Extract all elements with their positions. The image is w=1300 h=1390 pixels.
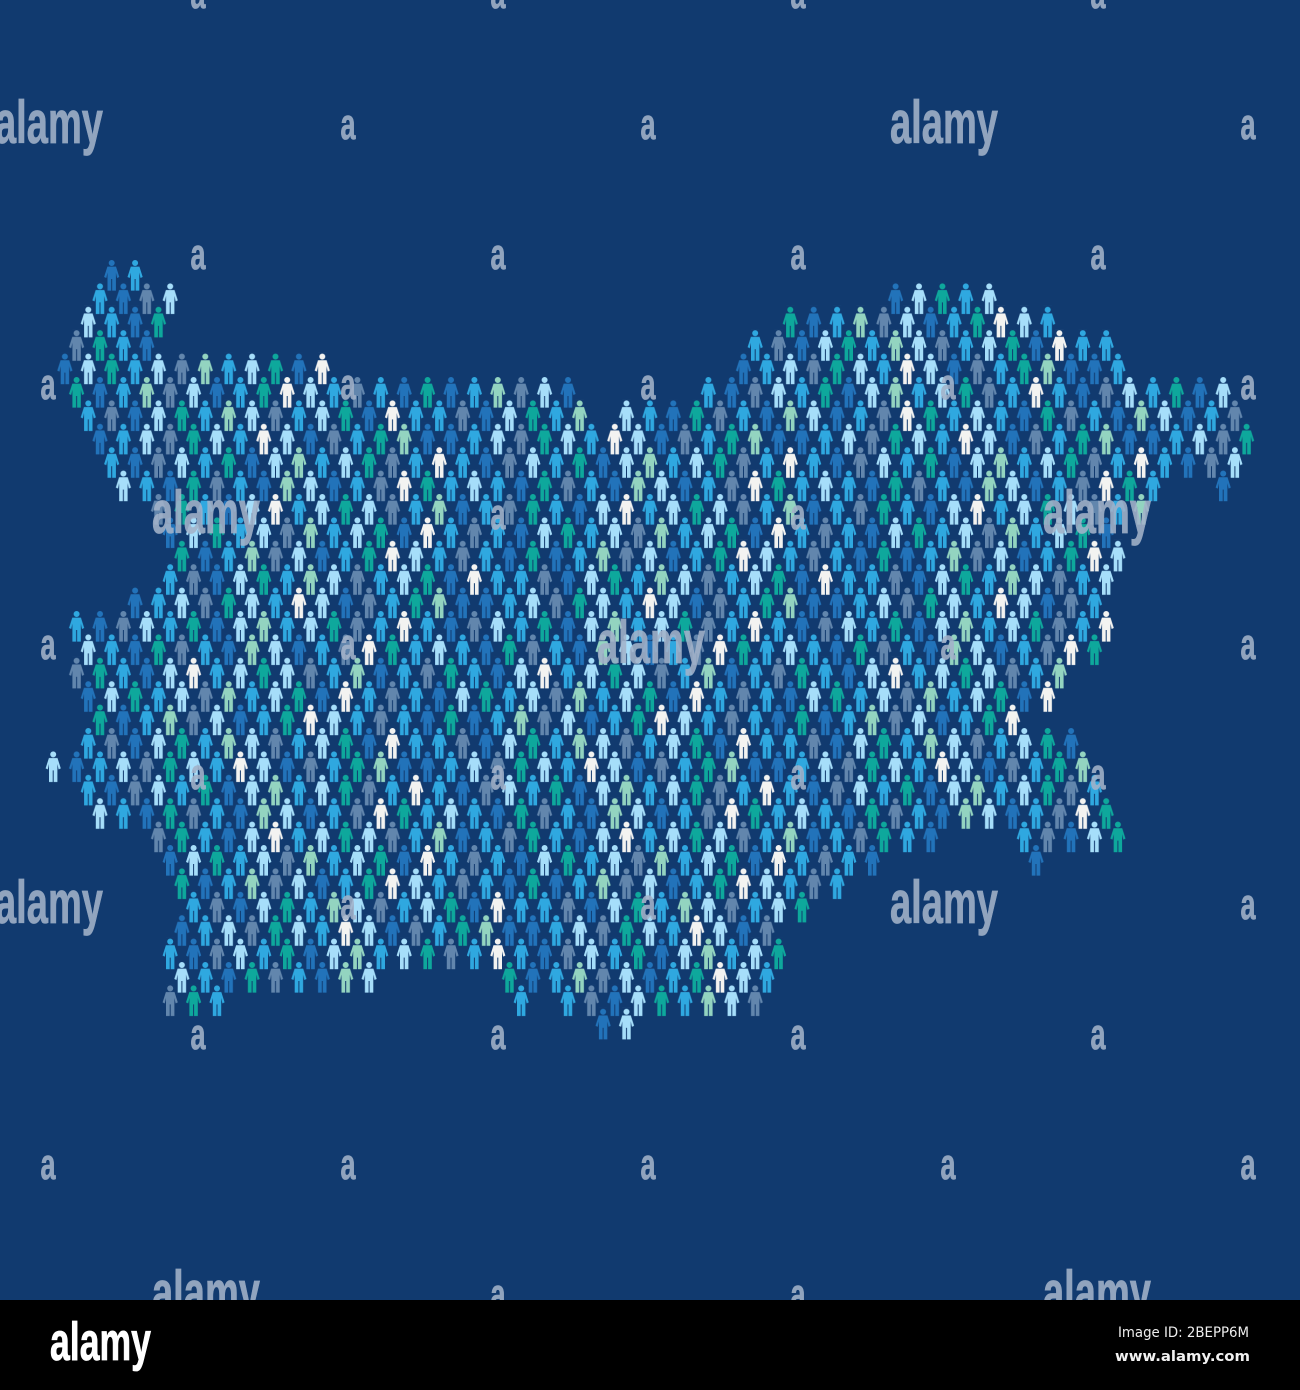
small watermark letters: a [1240, 880, 1256, 929]
small watermark letters: a [490, 750, 506, 799]
large alamy watermarks: alamy [1043, 1259, 1151, 1326]
small watermark letters: a [1090, 230, 1106, 279]
large alamy watermarks: alamy [1043, 479, 1151, 546]
large alamy watermarks: alamy [152, 1259, 260, 1326]
small watermark letters: a [490, 1270, 506, 1319]
small watermark letters: a [340, 620, 356, 669]
small watermark letters: a [340, 1140, 356, 1189]
small watermark letters: a [40, 1140, 56, 1189]
small watermark letters: a [1240, 620, 1256, 669]
small watermark letters: a [40, 360, 56, 409]
small watermark letters: a [640, 100, 656, 149]
large alamy watermarks: alamy [597, 609, 705, 676]
large alamy watermarks: alamy [890, 869, 998, 936]
small watermark letters: a [40, 620, 56, 669]
small watermark letters: a [490, 230, 506, 279]
small watermark letters: a [340, 100, 356, 149]
small watermark letters: a [1090, 750, 1106, 799]
small watermark letters: a [490, 490, 506, 539]
large alamy watermarks: alamy [0, 89, 103, 156]
small watermark letters: a [790, 1010, 806, 1059]
footer logo: alamy [50, 1312, 151, 1372]
small watermark letters: a [790, 750, 806, 799]
small watermark letters: a [340, 880, 356, 929]
small watermark letters: a [790, 1270, 806, 1319]
northern band of people icons [53, 259, 1258, 478]
small watermark letters: a [340, 360, 356, 409]
small watermark letters: a [940, 360, 956, 409]
small watermark letters: a [640, 1140, 656, 1189]
lower central band of people icons [42, 657, 1130, 853]
small watermark letters: a [1090, 1010, 1106, 1059]
southern band of people icons [158, 844, 1048, 1040]
small watermark letters: a [190, 1010, 206, 1059]
large alamy watermarks: alamy [152, 479, 260, 546]
large alamy watermarks: alamy [0, 869, 103, 936]
small watermark letters: a [190, 230, 206, 279]
large alamy watermarks: alamy [890, 89, 998, 156]
small watermark letters: a [190, 750, 206, 799]
small watermark letters: a [640, 880, 656, 929]
small watermark letters: a [790, 230, 806, 279]
large alamy watermarks [0, 89, 1151, 1326]
map of Bulgaria made of people icons [42, 259, 1258, 1040]
upper central band of people icons [65, 470, 1235, 665]
small watermark letters: a [1240, 360, 1256, 409]
small watermark letters: a [940, 620, 956, 669]
small watermark letters: a [790, 490, 806, 539]
small watermark letters: a [1240, 100, 1256, 149]
website: www.alamy.com [1115, 1349, 1250, 1365]
small watermark letters: a [940, 1140, 956, 1189]
image id: Image ID: 2BEPP6M [1118, 1325, 1249, 1341]
small watermark letters: a [490, 1010, 506, 1059]
small watermark letters: a [1240, 1140, 1256, 1189]
footer bar [0, 1300, 1300, 1390]
small watermark letters: a [640, 360, 656, 409]
